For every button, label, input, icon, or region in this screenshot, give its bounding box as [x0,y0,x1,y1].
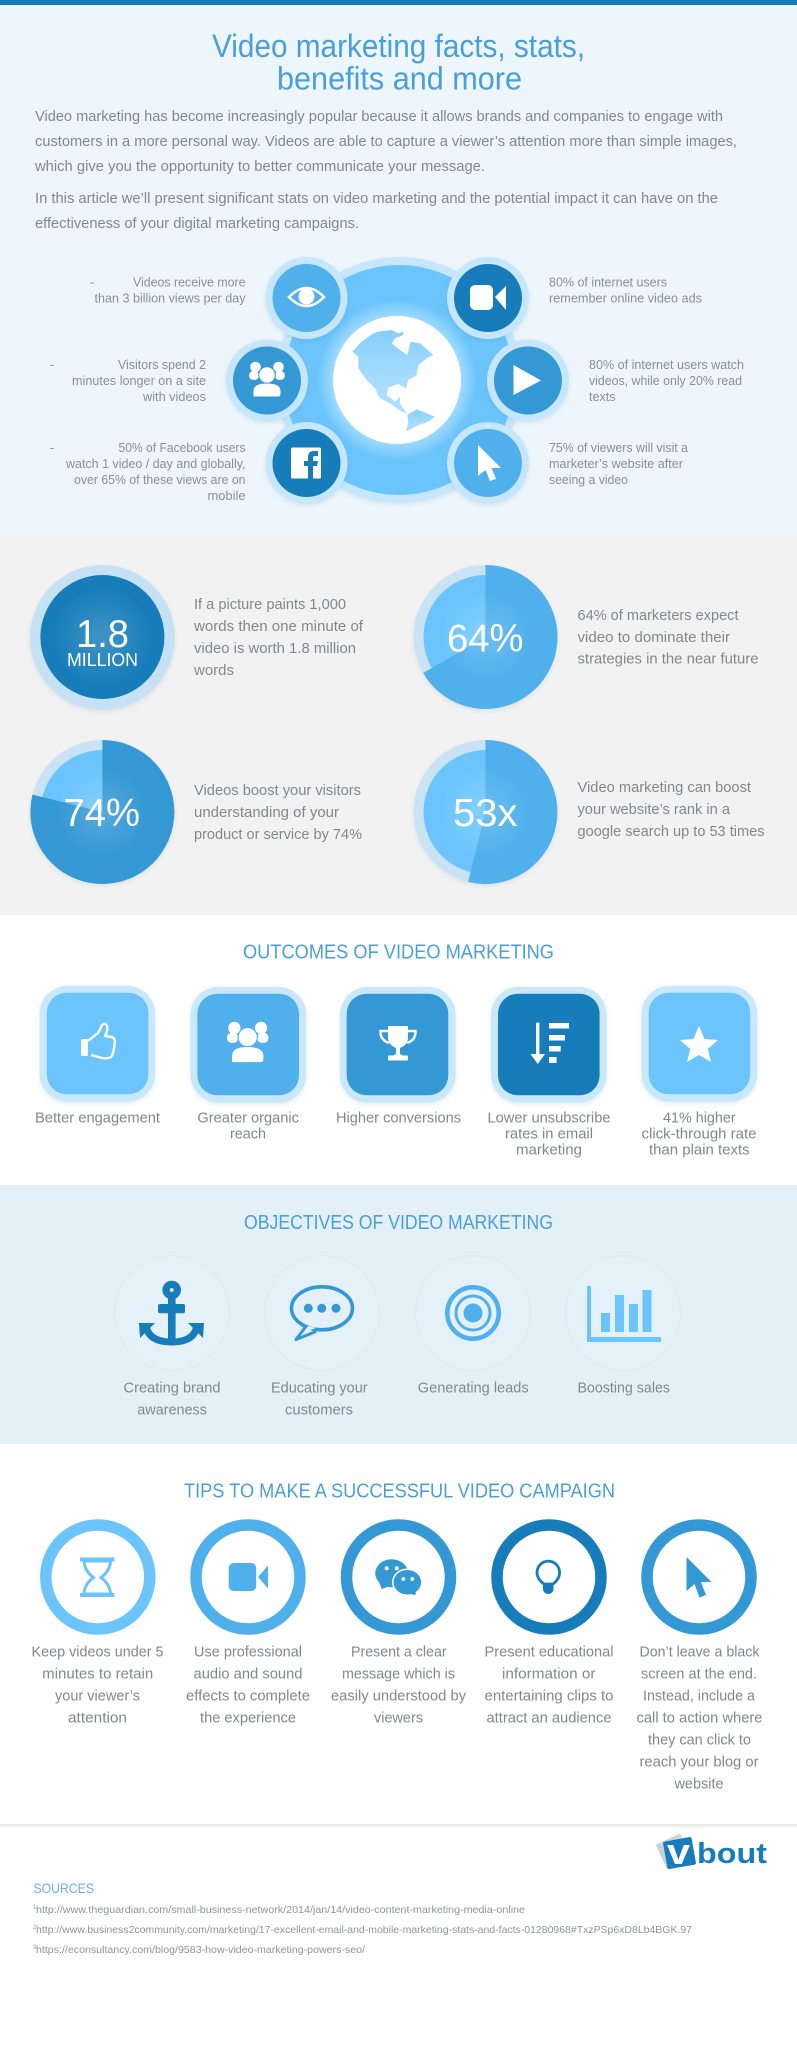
logo: vbout: bout [697,1838,767,1870]
intro paragraphs: which give you the opportunity to better communicate your message. [34,158,485,175]
objective: boosting sales: Boosting sales [578,1380,670,1396]
stat text: 1.8 million: words then one minute of [193,619,364,635]
fact: watch versus read [589,357,744,404]
stat text: 64%: video to dominate their [578,630,730,646]
stat text: 64%: strategies in the near future [578,652,758,668]
stat text: 64%: 64% of marketers expect [578,608,738,624]
stat text: 53x: your website’s rank in a [578,802,731,818]
pie chart: 53x: 53x [453,792,518,835]
icon: video camera [229,1563,268,1591]
stat text: 1.8 million: words [193,663,234,679]
icon: trophy [380,1026,416,1060]
tip: call to action [636,1525,762,1792]
icon: chat bubbles [375,1559,422,1595]
outcome: better engagement [35,986,160,1126]
objective: brand awareness: Creating brand [124,1380,220,1396]
fact: website visits: seeing a video [549,472,628,487]
source list: 3 [33,1945,37,1951]
fact: remember video ads: remember online video ads [549,290,702,306]
fact: two minutes longer: with videos [142,389,206,404]
icon: target [447,1287,499,1339]
source list: http://www.theguardian.com/small-business-network/2014/jan/14/video-content-marketing-media-online [36,1904,525,1916]
tip: professional audio: audio and sound [194,1666,302,1682]
objective: brand awareness [114,1256,230,1418]
tip: keep videos short: attention [68,1711,127,1727]
tip: call to action: reach your blog or [640,1754,759,1770]
intro paragraphs: customers in a more personal way. Videos are able to capture a viewer’s attention more than simple images, [35,133,737,150]
source list: https://econsultancy.com/blog/9583-how-video-marketing-powers-seo/ [36,1944,365,1956]
outcome: greater organic reach [191,987,306,1142]
fact: watch versus read: texts [589,389,616,404]
section: tips [32,1480,762,1792]
fact: facebook: - [50,440,54,455]
fact: billion views: than 3 billion views per day [94,290,246,306]
icon: video camera [447,257,529,339]
title: Video marketing facts, stats, [212,28,585,64]
tip: clear message [331,1525,467,1727]
heading: objectives: OBJECTIVES OF VIDEO MARKETING [244,1212,553,1234]
heading: tips: TIPS TO MAKE A SUCCESSFUL VIDEO CAMPAIGN [184,1480,615,1502]
fact: website visits: 75% of viewers will visit a [549,440,689,455]
title [212,28,585,96]
icon: bar chart [587,1286,661,1342]
tip: educational clips [484,1525,614,1727]
fact: facebook: 50% of Facebook users [118,440,246,455]
tip: keep videos short: Keep videos under 5 [32,1644,164,1660]
outcome: higher conversions [336,987,461,1126]
fact: remember video ads: 80% of internet users [549,274,667,290]
fact: remember video ads [549,274,702,306]
tip: clear message: message which is [342,1666,455,1682]
outcome: lower unsubscribe rates: rates in email [505,1126,593,1142]
objective: educating customers: Educating your [271,1380,368,1396]
fact: facebook: watch 1 video / day and globally, [65,456,245,471]
fact: facebook: mobile [208,488,246,503]
stat text: 53x [578,780,764,840]
tip: call to action: they can click to [648,1732,751,1748]
objective: generating leads: Generating leads [418,1380,529,1396]
source list: 2 [33,1925,37,1931]
pie chart: 53x [414,740,558,884]
icon: group [227,1022,269,1063]
logo: vbout [656,1831,767,1872]
tip: professional audio: effects to complete [186,1689,310,1705]
pie chart: 64%: 64% [447,618,524,660]
tip: professional audio: the experience [200,1711,296,1727]
tip: educational clips: information or [502,1666,596,1682]
tip: educational clips: entertaining clips to [484,1689,614,1705]
stat circle: 1.8 million [30,565,175,710]
section: outcomes [0,915,797,1185]
tip: clear message: Present a clear [351,1644,447,1660]
objective: educating customers: customers [285,1402,353,1418]
stat text: 1.8 million: If a picture paints 1,000 [194,597,346,613]
stat text: 74%: product or service by 74% [194,827,362,843]
icon: speech bubble [292,1287,352,1340]
section: introduction [0,0,797,535]
icon: cursor [686,1557,712,1598]
icon: play [487,340,569,422]
icon: hourglass [80,1558,114,1597]
fact: billion views: - [90,274,94,290]
icon: thumbs up [81,1024,115,1058]
icon: globe [333,316,461,444]
fact: facebook [50,440,246,503]
fact: watch versus read: 80% of internet users watch [589,357,744,372]
tip: clear message: easily understood by [331,1689,467,1705]
stat text: 1.8 million: video is worth 1.8 million [194,641,356,657]
fact: website visits: marketer’s website after [549,456,684,471]
fact: facebook: over 65% of these views are on [74,472,246,487]
outcome: greater organic reach: Greater organic [197,1110,299,1126]
outcome: higher click-through: click-through rate [642,1126,756,1142]
tip: professional audio: Use professional [194,1644,302,1660]
fact: two minutes longer: Visitors spend 2 [118,357,206,372]
stat text: 53x: google search up to 53 times [578,824,764,840]
icon: star [680,1026,718,1062]
fact: two minutes longer: - [50,357,54,372]
fact: watch versus read: videos, while only 20% read [589,373,742,388]
stat circle: 1.8 million: MILLION [67,650,138,670]
icon: anchor [139,1281,204,1342]
stat text: 74%: understanding of your [194,805,339,821]
pie chart: 74%: 74% [64,792,140,835]
objective: boosting sales [566,1256,680,1396]
tip: call to action: Don’t leave a black [640,1644,760,1660]
logo: vbout: v [667,1831,690,1872]
tip: educational clips: attract an audience [486,1711,612,1727]
section: key stats [0,535,797,915]
stat text: 1.8 million [193,597,364,679]
stat text: 74% [194,783,362,843]
fact: billion views: Videos receive more [133,274,246,290]
tip: call to action: Instead, include a [643,1689,756,1705]
source list: http://www.business2community.com/marketing/17-excellent-email-and-mobile-marketing-stats-and-facts-01280968#TxzPSp6xD8Lb4BGK.97 [36,1924,692,1936]
tip: call to action: screen at the end. [641,1666,757,1682]
objective: generating leads [416,1256,530,1396]
source list [33,1904,692,1956]
footer [0,1824,797,1956]
outcome: better engagement: Better engagement [35,1110,160,1126]
outcome: higher conversions: Higher conversions [336,1110,461,1126]
outcome: lower unsubscribe rates: Lower unsubscribe [488,1110,610,1126]
source list: 1 [33,1905,37,1911]
icon: descending sort [530,1023,569,1064]
tip: keep videos short: minutes to retain [42,1666,153,1682]
outcome: higher click-through: than plain texts [649,1142,750,1158]
icon: light bulb [537,1561,560,1594]
tip: call to action: call to action where [636,1711,762,1727]
objective: educating customers [264,1256,380,1418]
icon: eye [266,257,348,339]
intro paragraphs [34,108,737,232]
pie chart: 64% [414,565,558,709]
fact: two minutes longer: minutes longer on a site [72,373,206,388]
fact: billion views [90,274,246,306]
intro paragraphs: Video marketing has become increasingly popular because it allows brands and companies to engage with [35,108,723,125]
outcome: higher click-through: 41% higher [663,1110,736,1126]
pie chart: 74% [30,740,174,884]
stat circle: 1.8 million: 1.8 [76,613,129,656]
stat text: 53x: Video marketing can boost [578,780,751,796]
outcome: lower unsubscribe rates [488,987,610,1158]
tip: keep videos short [32,1525,164,1727]
icon: facebook [266,422,348,504]
outcome: lower unsubscribe rates: marketing [516,1142,582,1158]
tip: professional audio [186,1525,310,1727]
tip: keep videos short: your viewer’s [55,1689,140,1705]
heading: sources: SOURCES [34,1880,94,1896]
fact: two minutes longer [50,357,206,404]
objective: brand awareness: awareness [137,1402,207,1418]
intro paragraphs: effectiveness of your digital marketing campaigns. [35,215,359,232]
outcome: higher click-through [642,986,757,1158]
stat text: 64% [578,608,758,668]
icon: people [226,340,308,422]
tip: educational clips: Present educational [484,1644,614,1660]
fact: website visits [549,440,689,487]
tip: call to action: website [674,1776,724,1792]
globe hub diagram [226,257,569,504]
heading: outcomes: OUTCOMES OF VIDEO MARKETING [243,942,554,964]
intro paragraphs: In this article we’ll present significant stats on video marketing and the potential impact it can have on the [35,190,718,207]
tip: clear message: viewers [374,1711,423,1727]
section: objectives [0,1185,797,1444]
outcome: greater organic reach: reach [230,1126,266,1142]
icon: cursor [447,422,529,504]
stat text: 74%: Videos boost your visitors [194,783,361,799]
title: benefits and more [277,60,522,96]
